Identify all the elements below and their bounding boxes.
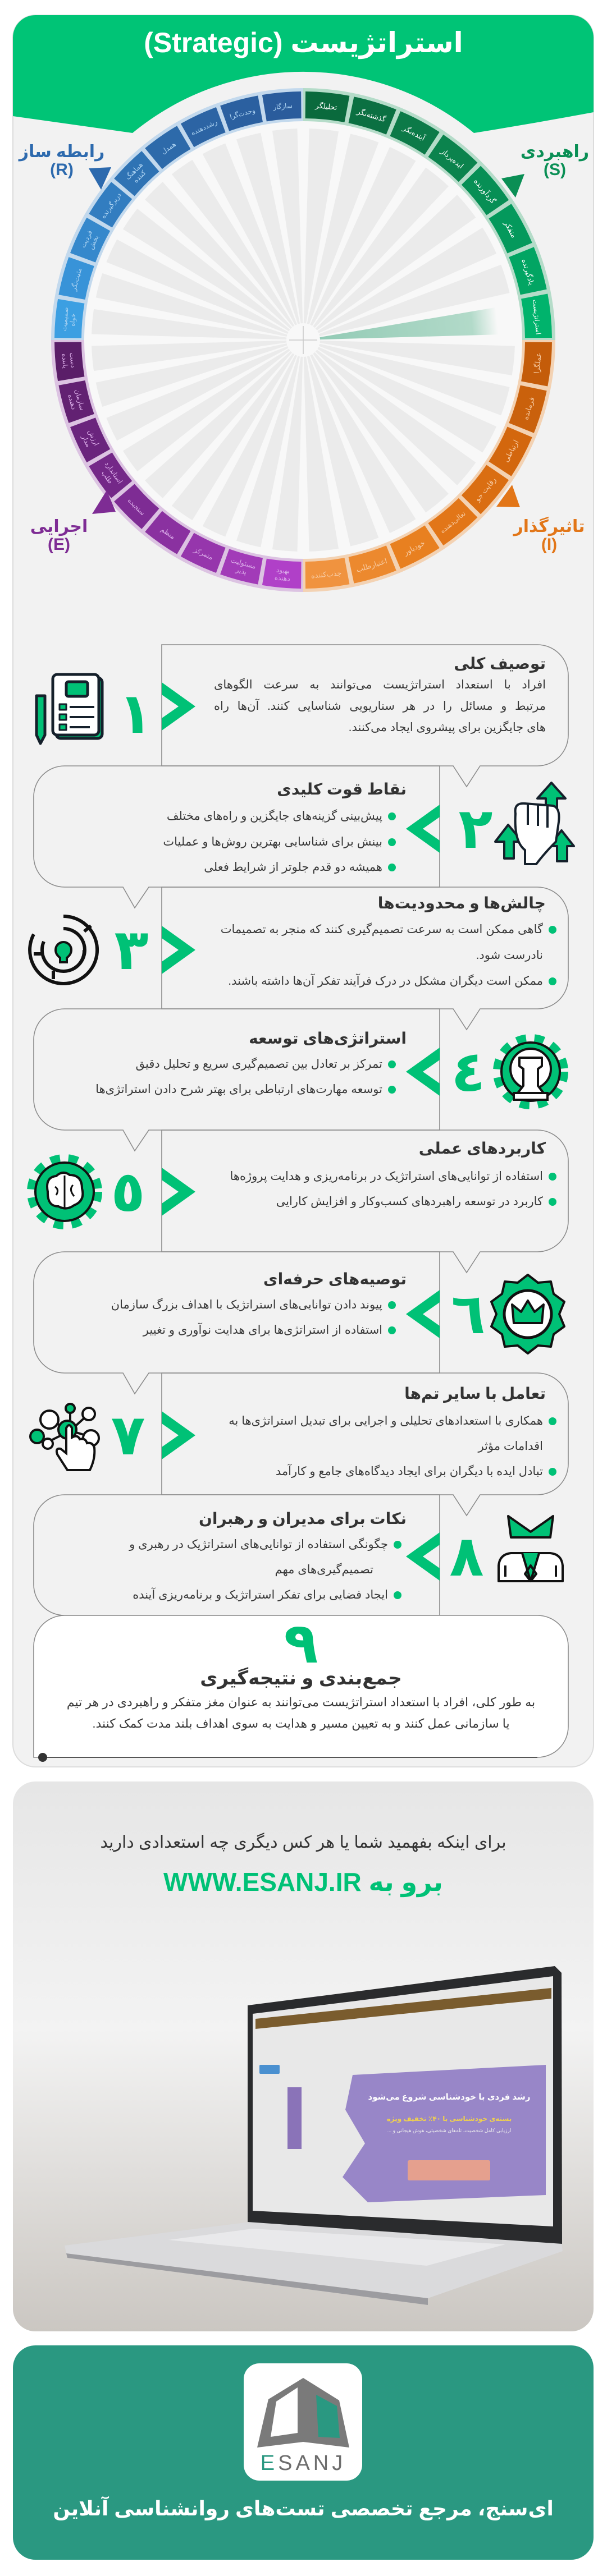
segments: executing (E): دهنده	[274, 573, 290, 583]
segments: relationship (R): مثبت‌نگر	[70, 267, 84, 292]
segments: executing (E): سازمان	[72, 388, 86, 411]
segments: relationship (R): هماهنگ	[124, 161, 144, 181]
segments: executing (E)	[54, 340, 303, 589]
segments: relationship (R): وحدت‌گرا	[229, 106, 256, 121]
bullets 4: تمرکز بر تعادل بین تصمیم‌گیری سریع و تحلیل دقیق	[136, 1058, 382, 1071]
segments: influencing (I)	[303, 339, 553, 590]
number 4: ٤	[451, 1040, 486, 1103]
bullets 6: استفاده از استراتژی‌ها برای هدایت نوآوری و تغییر	[143, 1324, 382, 1337]
number 5: ٥	[111, 1160, 145, 1223]
heading 3: چالش‌ها و محدودیت‌ها	[378, 894, 546, 912]
bullets 7: اقدامات مؤثر	[478, 1440, 543, 1453]
segments: relationship (R): دربرگیرنده	[99, 191, 123, 221]
promo card	[13, 1781, 594, 2331]
number 9: ۹	[284, 1612, 318, 1675]
label: influencing I: تاثیرگذار	[513, 517, 585, 536]
segments: executing (E): طلب	[100, 469, 115, 485]
text 9: به طور کلی، افراد با استعداد استراتژیست می‌توانند به عنوان مغز متفکر و راهبردی در هر تیم یا سازمانی عمل کنند و به تعیین مسیر و هدایت به سوی اهداف بلند مدت کمک کنند.	[67, 1695, 535, 1730]
segments: executing (E): بهبود	[276, 566, 290, 575]
bullets 7: تبادل ایده با دیگران برای ایجاد دیدگاه‌های جامع و کارآمد	[276, 1465, 543, 1478]
label: strategic S: (S)	[544, 160, 566, 179]
footer text: ای‌سنج، مرجع تخصصی تست‌های روانشناسی آنلاین	[53, 2497, 554, 2520]
segments: influencing (I): رقابت جو	[473, 476, 498, 504]
segments: strategic (S): گردآورنده	[472, 177, 498, 206]
number 6: ٦	[451, 1283, 486, 1346]
inner disk	[84, 121, 522, 559]
segments: executing (E): دهنده	[66, 393, 78, 411]
label: executing E	[30, 517, 88, 554]
chevrons	[162, 682, 440, 1581]
heading 1: توصیف کلی	[454, 655, 546, 672]
segments: strategic (S): ایده‌پرداز	[439, 146, 465, 171]
heading 6: توصیه‌های حرفه‌ای	[263, 1270, 407, 1288]
pale outer bands	[303, 88, 555, 340]
promo text: برای اینکه بفهمید شما یا هر کس دیگری چه استعدادی دارید	[100, 1833, 506, 1852]
segments: executing (E): یابنده	[60, 353, 70, 369]
heading 7: تعامل با سایر تم‌ها	[404, 1385, 546, 1402]
bullets 5: کاربرد در توسعه راهبردهای کسب‌وکار و افزایش کارایی	[276, 1195, 543, 1208]
icon: fist with arrows	[495, 783, 574, 864]
icon: badge with crown	[491, 1275, 564, 1353]
text 1 line 3: های جایگزین برای پیشروی ایجاد می‌کنند.	[349, 721, 546, 734]
green header	[13, 15, 594, 133]
inner spokes	[91, 128, 515, 552]
label: strategic S: راهبردی	[521, 143, 589, 161]
laptop: بسته‌ی خودشناسی با ۴۰٪ تخفیف ویژه	[387, 2115, 512, 2123]
label: strategic S	[521, 143, 589, 179]
box 9 conclusion	[34, 1615, 568, 1762]
text 1 line 2: مرتبط و مسائل را در هر سناریویی شناسایی کنند. آن‌ها راه	[214, 700, 546, 713]
bullets 3	[221, 922, 556, 988]
number 7: ۷	[111, 1404, 145, 1467]
bullets 7: همکاری با استعدادهای تحلیلی و اجرایی برای تبدیل استراتژی‌ها به	[229, 1415, 543, 1427]
section boxes outlines	[34, 645, 568, 1615]
bullets 2	[163, 809, 396, 874]
bullets 7	[229, 1415, 556, 1478]
bullets 8	[129, 1537, 401, 1601]
segments: strategic (S): استراتژیست	[531, 299, 542, 335]
segments: relationship (R): همدل	[160, 140, 177, 155]
segments: relationship (R): فردیت	[79, 229, 94, 249]
segments: influencing (I): فرمانده	[521, 396, 537, 421]
segments: executing (E): مدار	[80, 433, 93, 448]
label: influencing I: (I)	[541, 535, 557, 554]
segments: influencing (I): خودباور	[401, 539, 427, 558]
heading 9: جمع‌بندی و نتیجه‌گیری	[200, 1668, 402, 1689]
segments: executing (E): دست	[68, 352, 77, 368]
bullets 5	[230, 1170, 556, 1208]
icon: maze with bulb	[30, 916, 97, 984]
title: استراتژیست (Strategic)	[144, 27, 463, 58]
segments: relationship (R): رشددهنده	[190, 118, 219, 137]
bullets 3: ممکن است دیگران مشکل در درک فرآیند تفکر آن‌ها داشته باشند.	[228, 975, 543, 988]
promo link: برو به WWW.ESANJ.IR	[163, 1867, 443, 1897]
number 3: ۳	[114, 919, 149, 981]
footer logo	[244, 2363, 362, 2481]
laptop	[65, 1966, 563, 2305]
bullets 5: استفاده از توانایی‌های استراتژیک در برنامه‌ریزی و هدایت پروژه‌ها	[230, 1170, 543, 1183]
number 8: ۸	[449, 1525, 484, 1588]
heading 4: استراتژی‌های توسعه	[249, 1030, 407, 1047]
wheel	[51, 88, 555, 592]
label: influencing I	[513, 516, 585, 554]
segments: strategic (S): آینده‌نگر	[401, 123, 427, 143]
label: relationship R	[18, 143, 104, 179]
label: relationship R: رابطه ساز	[19, 143, 104, 161]
footer card	[13, 2345, 594, 2560]
bullets 3: نادرست شود.	[476, 949, 543, 962]
segments: relationship (R): صمیمیت	[60, 307, 70, 332]
segments: strategic (S): گذشته‌نگر	[355, 107, 387, 125]
label: executing E: (E)	[48, 535, 70, 554]
section 1	[118, 655, 546, 745]
label: executing E: اجرایی	[30, 517, 88, 536]
arrow: green triangle	[501, 174, 524, 198]
heading 2: نقاط قوت کلیدی	[277, 780, 407, 798]
box 9: number, heading, text	[67, 1612, 535, 1730]
bullets 8: چگونگی استفاده از توانایی‌های استراتژیک در رهبری و	[129, 1538, 388, 1551]
icon: crown and suit	[499, 1516, 563, 1581]
icon: network with hand	[30, 1404, 99, 1470]
icon: clipboard	[36, 674, 102, 743]
bullets 4	[95, 1057, 396, 1096]
text 1: افراد با استعداد استراتژیست می‌توانند به سرعت الگوهای	[214, 678, 546, 691]
segments: executing (E): استاندارد	[103, 460, 124, 485]
segments: strategic (S): متفکر	[502, 219, 518, 240]
segments: relationship (R)	[54, 91, 303, 340]
arrow: blue triangle	[89, 167, 111, 190]
bullets 8: تصمیم‌گیری‌های مهم	[275, 1563, 373, 1576]
bullets 4: توسعه مهارت‌های ارتباطی برای بهتر شرح دادن استراتژی‌ها	[95, 1083, 382, 1096]
segments: influencing (I): جذب‌کننده	[311, 568, 342, 580]
bullets 2: بینش برای شناسایی بهترین روش‌ها و عملیات	[163, 835, 382, 848]
segments: influencing (I): تعالی‌دهنده	[439, 509, 467, 535]
segments: executing (E): ارزش	[86, 429, 101, 447]
segments: influencing (I): اعتبارطلب	[355, 557, 388, 575]
bullets 2: همیشه دو قدم جلوتر از شرایط فعلی	[204, 861, 382, 874]
heading 5: کاربردهای عملی	[419, 1140, 546, 1157]
laptop: رشد فردی با خودشناسی شروع می‌شود	[368, 2092, 531, 2102]
heading 8: نکات برای مدیران و رهبران	[199, 1510, 407, 1527]
segments: executing (E): مسئولیت	[230, 556, 257, 571]
segments: relationship (R): خواه	[69, 313, 78, 327]
segments: executing (E): سنجیده	[126, 497, 147, 517]
segments: relationship (R): کننده	[132, 168, 148, 185]
segments: strategic (S): تحلیلگر	[314, 101, 337, 112]
segments: influencing (I): ارتباطی	[501, 438, 521, 464]
label: relationship R: (R)	[50, 160, 74, 179]
bullets 6: پیوند دادن توانایی‌های استراتژیک با اهداف بزرگ سازمان	[111, 1298, 382, 1311]
footer logo: ESANJ	[261, 2451, 346, 2475]
highlighted wedge: strategic	[302, 305, 515, 355]
bullets 8: ایجاد فضایی برای تفکر استراتژیک و برنامه‌ریزی آینده	[133, 1588, 388, 1601]
segments: executing (E): منظم	[159, 525, 177, 541]
segments: strategic (S)	[303, 90, 553, 341]
segments: relationship (R): بخش	[87, 234, 101, 251]
segments: influencing (I): عملگرا	[532, 352, 544, 374]
arrow: orange triangle	[496, 485, 520, 507]
number 1: ۱	[118, 682, 153, 745]
segments: strategic (S): یادگیرنده	[519, 258, 536, 286]
arrow: purple triangle	[92, 490, 116, 514]
laptop: ارزیابی کامل شخصیت، تله‌های شخصیتی، هوش هیجانی و ...	[387, 2128, 511, 2133]
icon: gear with rook	[499, 1040, 562, 1103]
segments: executing (E): پذیر	[234, 566, 248, 577]
segments: executing (E): متمرکز	[192, 545, 214, 562]
segments: relationship (R): سازگار	[272, 102, 293, 112]
icon: gear with brain	[33, 1160, 96, 1223]
main card	[13, 15, 594, 1767]
bullets 6	[111, 1298, 396, 1337]
bullets 3: گاهی ممکن است به سرعت تصمیم‌گیری کنند که منجر به تصمیمات	[221, 923, 543, 936]
bullets 2: پیش‌بینی گزینه‌های جایگزین و راه‌های مختلف	[167, 810, 382, 823]
number 2: ۲	[458, 797, 493, 860]
